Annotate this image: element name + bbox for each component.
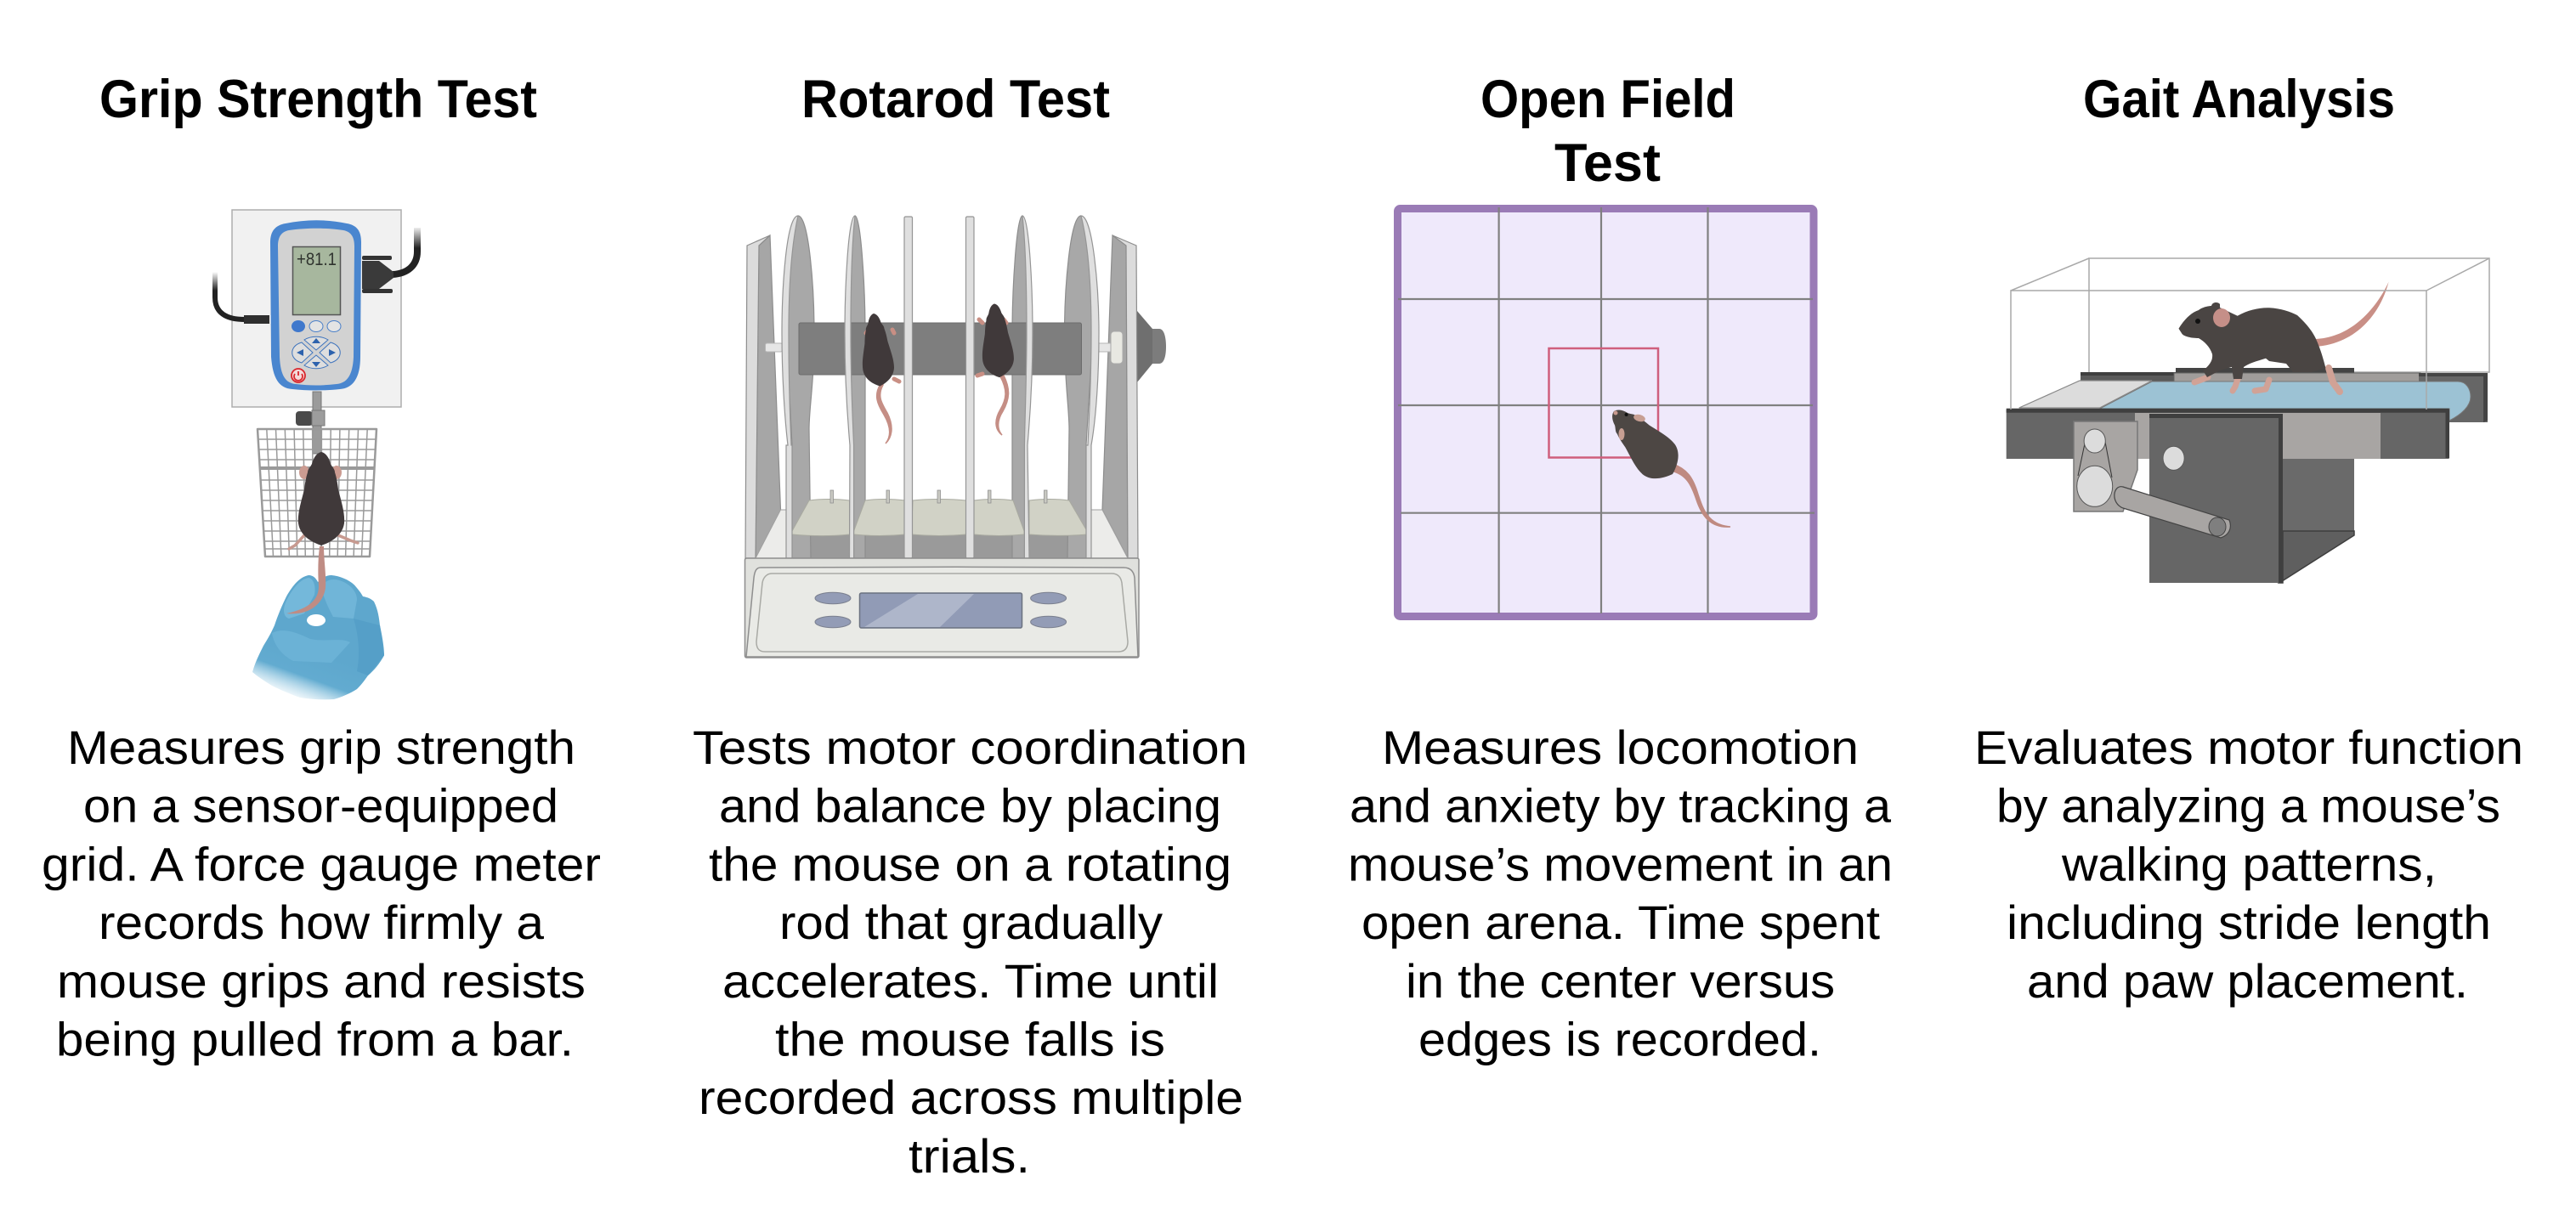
center zone (1548, 348, 1658, 457)
description: rotarod test: the mouse on a rotating (709, 837, 1231, 890)
rotating discs, light rims (782, 216, 1099, 558)
rotating rod (799, 323, 1081, 375)
support block, front (2149, 414, 2283, 583)
glass enclosure, back (2011, 258, 2489, 372)
description: rotarod test: accelerates. Time until (722, 954, 1219, 1008)
icon: power button (292, 369, 305, 382)
gauge directional pad (292, 336, 340, 369)
gauge buttons (292, 320, 341, 332)
description: grip strength test: records how firmly a (99, 896, 545, 949)
heading: gait analysis: Gait Analysis (2083, 70, 2395, 129)
description: grip strength test: grid. A force gauge meter (42, 837, 601, 890)
tray sensor pins (830, 490, 1047, 503)
mouse on rod, left lane (858, 312, 899, 444)
rotating discs, back faces (786, 216, 1093, 558)
lane trays (792, 500, 1087, 535)
mouse on rod, right lane (977, 302, 1015, 435)
tail (2314, 282, 2389, 347)
icon: right plug and cable (362, 228, 417, 293)
force gauge meter (270, 220, 361, 391)
illustration: grip strength apparatus (215, 210, 417, 699)
control base (744, 558, 1139, 658)
illustration: rotarod apparatus (744, 216, 1166, 658)
icon: left cable (215, 272, 269, 324)
axle (765, 331, 1123, 364)
description: open field test: in the center versus (1406, 954, 1835, 1008)
crank handle (2115, 487, 2230, 538)
description: rotarod test: rod that gradually (779, 896, 1163, 949)
side walls (745, 235, 1138, 558)
heading: rotarod test: Rotarod Test (801, 70, 1110, 129)
panel: open field test (1348, 70, 1893, 1065)
description: rotarod test: the mouse falls is (775, 1013, 1165, 1065)
illustration: open field arena (1397, 207, 1815, 617)
description: grip strength test: mouse grips and resists (57, 954, 586, 1008)
description: grip strength test: on a sensor-equipped (83, 779, 558, 833)
belt drive plate and pulleys (2074, 421, 2137, 511)
description: rotarod test (693, 721, 1248, 1183)
description: rotarod test: and balance by placing (719, 779, 1221, 833)
description: gait analysis: including stride length (2007, 896, 2491, 949)
paws and legs (2194, 368, 2340, 392)
gloved hand (252, 575, 384, 699)
description: grip strength test: being pulled from a bar. (56, 1013, 574, 1065)
description: rotarod test: Tests motor coordination (693, 721, 1248, 774)
panel: gait analysis (1974, 70, 2523, 1008)
support block, rear (2279, 459, 2354, 583)
mouse in arena (1598, 396, 1730, 527)
gauge screen with reading: +81.1 (297, 250, 337, 269)
entry plate (2019, 381, 2152, 408)
illustration: gait treadmill (2007, 258, 2489, 583)
description: grip strength test (42, 721, 601, 1065)
description: open field test: edges is recorded. (1418, 1013, 1821, 1065)
description: open field test: Measures locomotion (1382, 721, 1859, 774)
arena grid (1398, 207, 1815, 613)
treadmill front bar (2007, 409, 2449, 459)
motor housing (1137, 311, 1166, 382)
description: gait analysis: walking patterns, (2061, 837, 2437, 890)
heading: open field test: Open Field (1480, 70, 1735, 129)
ear (2213, 308, 2230, 327)
treadmill belt (2100, 381, 2471, 421)
description: gait analysis: by analyzing a mouse’s (1996, 779, 2500, 833)
description: open field test: open arena. Time spent (1362, 896, 1880, 949)
description: gait analysis: Evaluates motor function (1974, 721, 2523, 774)
panel: grip strength test (42, 70, 601, 1065)
description: gait analysis: and paw placement. (2027, 954, 2468, 1008)
wire grid (258, 429, 376, 557)
description: gait analysis (1974, 721, 2523, 1008)
description: open field test: mouse’s movement in an (1348, 837, 1893, 890)
control buttons (815, 592, 1067, 628)
backing panel (232, 210, 401, 407)
description: rotarod test: trials. (909, 1129, 1030, 1183)
description: grip strength test: Measures grip strength (67, 721, 575, 774)
heading: open field test: Test (1554, 133, 1661, 193)
body (2179, 302, 2325, 379)
mouse on grid (286, 452, 358, 613)
glass enclosure, front (2011, 291, 2426, 410)
rod and clamp (296, 392, 325, 454)
arena floor and border (1397, 209, 1814, 617)
description: open field test: and anxiety by tracking a (1350, 779, 1892, 833)
mouse on treadmill (2179, 282, 2389, 392)
eye (2195, 319, 2200, 324)
floor and lower compartment (756, 510, 1128, 558)
heading: open field test (1480, 70, 1735, 193)
gauge screen with reading (292, 246, 340, 314)
description: rotarod test: recorded across multiple (699, 1071, 1243, 1124)
panel: rotarod test (693, 70, 1248, 1183)
display screen (860, 593, 1022, 628)
description: open field test (1348, 721, 1893, 1065)
treadmill back rail (2081, 368, 2488, 422)
heading: grip strength test: Grip Strength Test (99, 70, 537, 129)
